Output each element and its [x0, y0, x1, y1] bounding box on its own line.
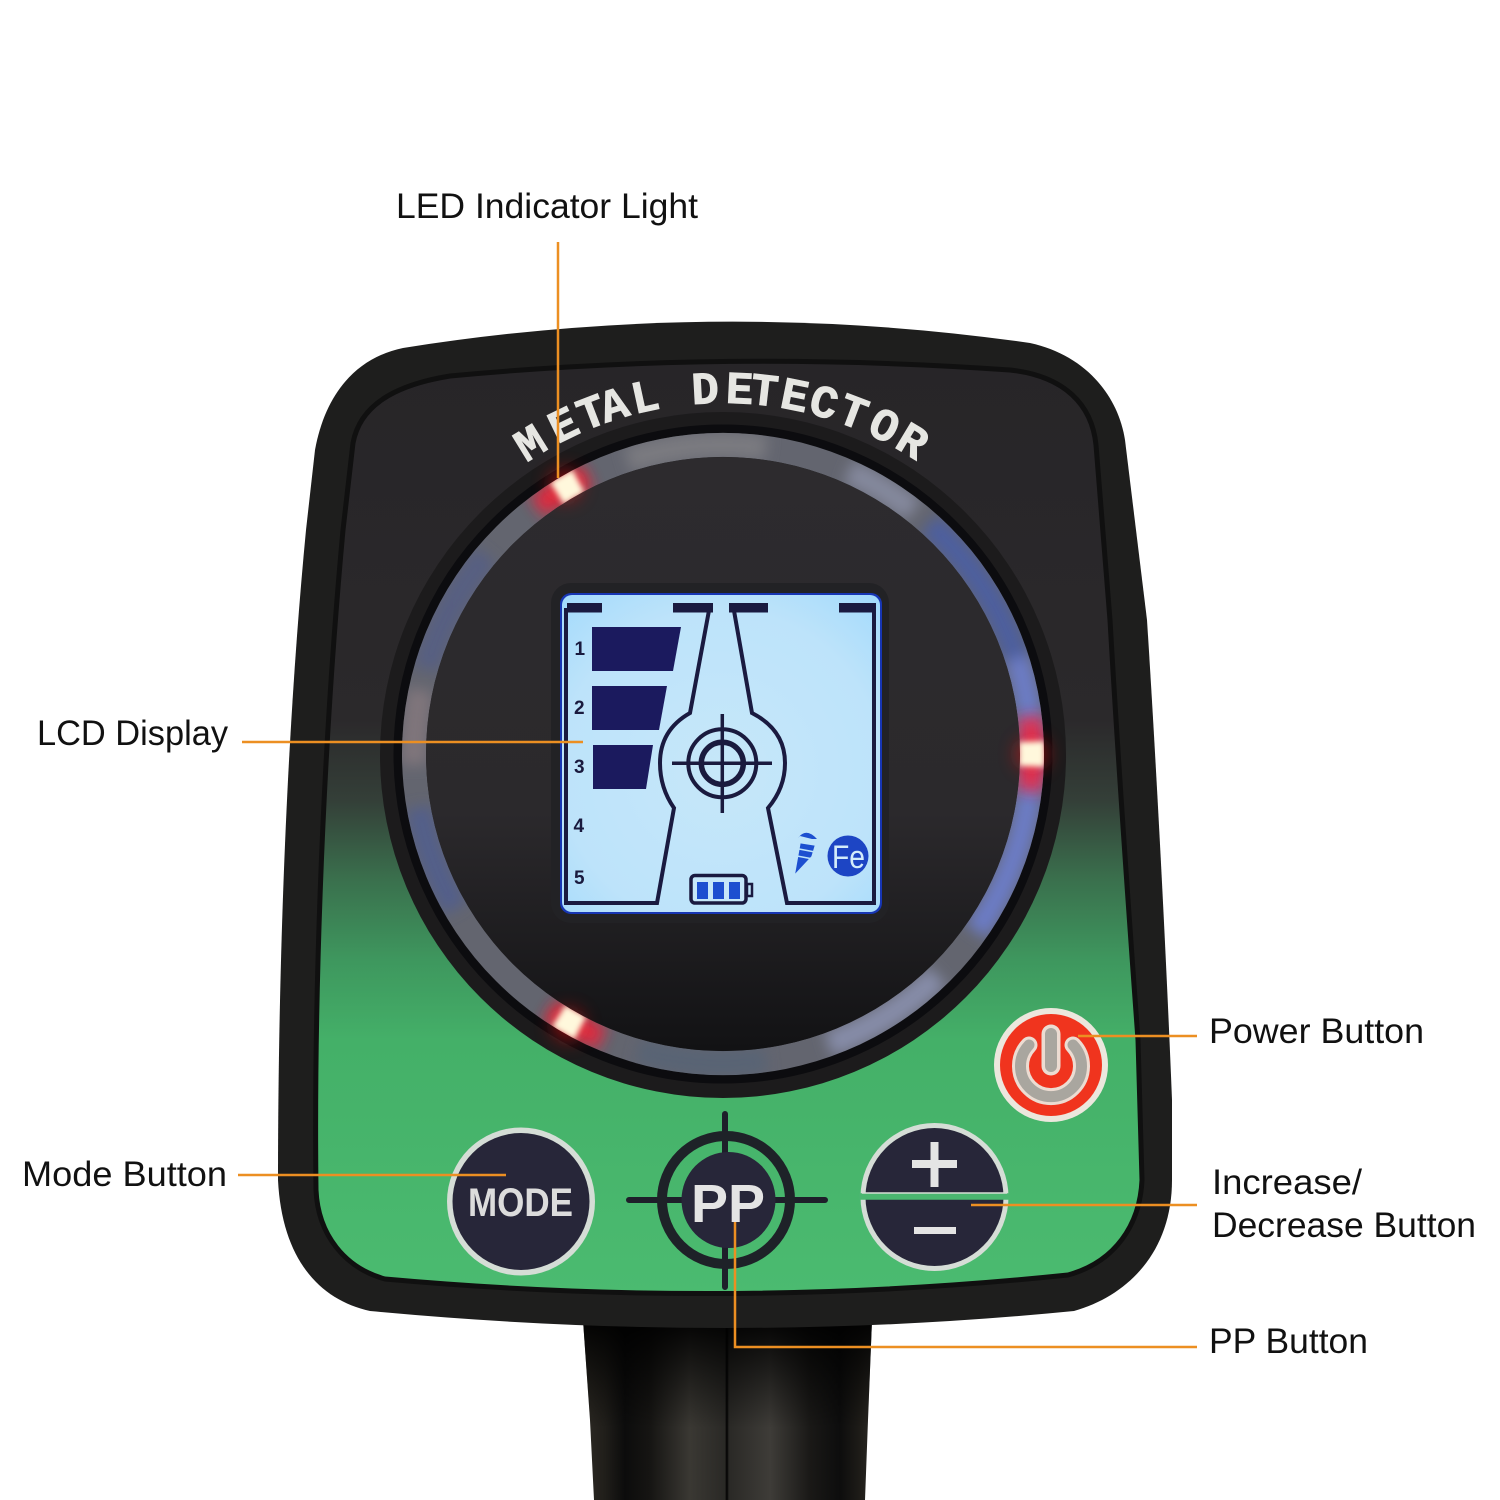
label: Increase/Decrease Button [1212, 1163, 1476, 1245]
panel: face plate [316, 361, 1142, 1294]
LED indicator lights [447, 458, 1101, 1276]
device body [278, 322, 1172, 1328]
increase decrease button [859, 1123, 1010, 1271]
leader line: Increase/Decrease [971, 1204, 1197, 1206]
LCD frame lines [566, 605, 874, 903]
mode button [447, 1128, 595, 1276]
LED ring [402, 432, 1044, 1076]
level numbers: 1 [574, 639, 586, 660]
PP button [629, 1114, 825, 1287]
level numbers: 4 [574, 816, 584, 837]
crosshair [672, 714, 772, 813]
label: LCD Display: LCD Display [37, 714, 228, 753]
round display housing [380, 412, 1066, 1098]
leader line: LCD [242, 741, 583, 743]
level bars [592, 627, 681, 671]
level numbers [574, 639, 586, 889]
leader line: Power [1078, 1035, 1197, 1037]
icon: Fe badge: Fe [832, 839, 865, 875]
leader line: PP [735, 1222, 1197, 1347]
leader line: Mode [238, 1174, 506, 1176]
level numbers: 3 [574, 757, 585, 778]
label: LED Indicator Light: LED Indicator Light [396, 187, 698, 226]
mode button: MODE [468, 1181, 573, 1225]
level numbers: 2 [574, 698, 585, 719]
disc [426, 457, 1020, 1051]
battery [691, 876, 752, 903]
label: Increase/Decrease Button: Increase/ [1212, 1163, 1362, 1202]
label: Power Button: Power Button [1209, 1012, 1424, 1051]
PP button: PP [691, 1174, 765, 1234]
level numbers: 5 [574, 868, 585, 889]
label: Mode Button: Mode Button [22, 1155, 227, 1194]
label: Increase/Decrease Button: Decrease Button [1212, 1206, 1476, 1245]
label: PP Button: PP Button [1209, 1322, 1368, 1361]
icon: screw [796, 833, 817, 872]
leader line: LED [557, 242, 559, 478]
LCD display [551, 583, 889, 923]
handle [583, 1320, 872, 1500]
power button [994, 1008, 1108, 1122]
brand text: METAL DETECTOR: METAL DETECTOR [506, 364, 937, 475]
